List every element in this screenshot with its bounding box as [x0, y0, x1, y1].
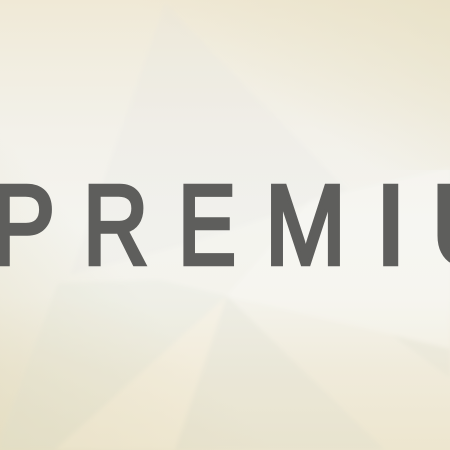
title: PREMIUM, cropped at the edges: M: [265, 163, 346, 289]
title: PREMIUM, cropped at the edges: E: [178, 163, 236, 289]
facet: centre lower wedge: [175, 296, 385, 450]
facet: bright right region: [227, 168, 450, 348]
facet: left lower wedge: [0, 280, 227, 450]
facet: top grey wedge: [70, 3, 347, 275]
facet: light lower ray: [55, 296, 227, 450]
title: PREMIUM, cropped at the edges: [0, 161, 450, 289]
title: PREMIUM, cropped at the edges: R: [83, 161, 148, 288]
title: PREMIUM, cropped at the edges: I: [375, 162, 406, 288]
facet: far right wedge: [392, 335, 450, 378]
